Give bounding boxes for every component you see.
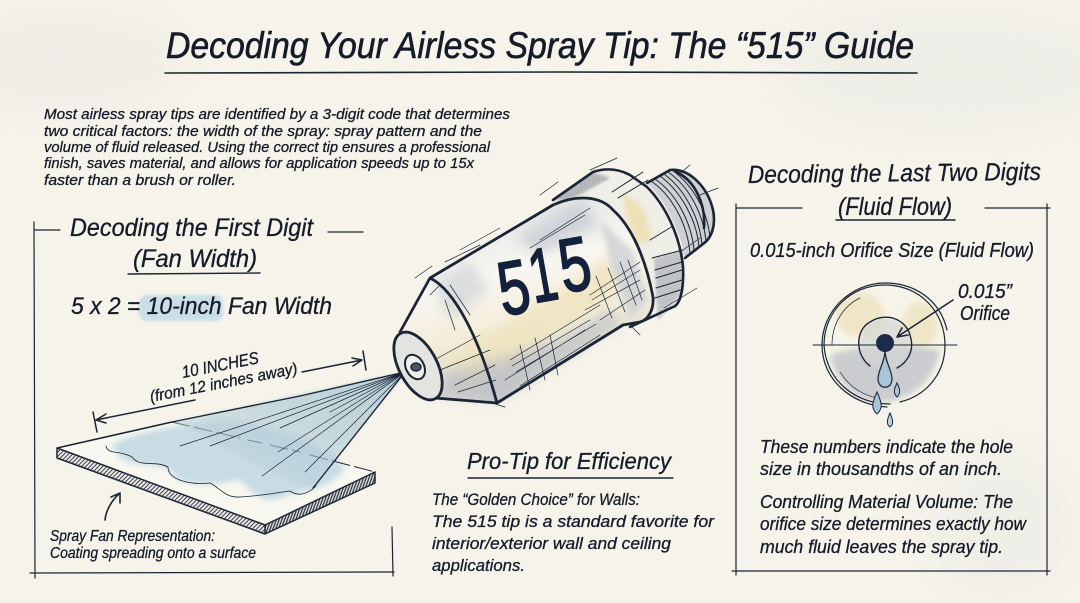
panel frame <box>30 222 394 578</box>
515 marking: 1 <box>522 231 564 320</box>
cylindrical body <box>400 198 653 403</box>
nozzle illustration <box>384 158 718 408</box>
intro text block: faster than a brush or roller. <box>44 172 236 189</box>
formula with highlight: 5 x 2 = 10-inch Fan Width <box>71 293 332 320</box>
panel: pro-tip for efficiency <box>432 448 715 575</box>
explanation text: These numbers indicate the hole <box>760 437 1013 457</box>
pro-tip text <box>432 490 715 575</box>
orifice size heading: 0.015-inch Orifice Size (Fluid Flow) <box>750 240 1034 262</box>
panel frame <box>732 204 1050 575</box>
heading: first digit: (Fan Width) <box>133 245 257 273</box>
explanation text: much fluid leaves the spray tip. <box>760 537 1003 557</box>
heading: last two digits: Decoding the Last Two Digits <box>748 158 1041 189</box>
panel: first digit fan width <box>30 214 405 578</box>
orifice diagram <box>813 283 957 427</box>
title: Decoding Your Airless Spray Tip: The “515” Guide <box>166 25 914 66</box>
explanation text: size in thousandths of an inch. <box>760 459 1002 479</box>
pro-tip text: The 515 tip is a standard favorite for <box>432 512 715 531</box>
pro-tip text: applications. <box>432 556 525 575</box>
explanation text: orifice size determines exactly how <box>760 514 1027 534</box>
pro-tip text: interior/exterior wall and ceiling <box>432 534 672 553</box>
surface with coating <box>57 420 375 534</box>
intro text block: two critical factors: the width of the spray: spray pattern and the <box>44 123 482 140</box>
heading: first digit <box>70 214 314 274</box>
orifice label <box>958 281 1013 325</box>
pro-tip text: The “Golden Choice” for Walls: <box>432 490 640 509</box>
caption: spray fan representation: Spray Fan Representation: <box>50 528 215 545</box>
hex collar <box>553 169 683 327</box>
explanation text <box>760 437 1027 557</box>
caption: spray fan representation <box>50 528 256 562</box>
heading: pro-tip: Pro-Tip for Efficiency <box>467 448 672 474</box>
arrow to surface <box>105 493 120 520</box>
intro text block: volume of fluid released. Using the correct tip ensures a professional <box>44 139 491 156</box>
dimension label: 10 inches: (from 12 inches away) <box>149 361 299 406</box>
515 marking: 5 <box>552 221 597 310</box>
orifice label: 0.015” <box>958 281 1013 303</box>
orifice arrow <box>897 300 953 337</box>
intro text block: finish, saves material, and allows for application speeds up to 15x <box>44 155 474 172</box>
spray fan <box>172 372 405 488</box>
intro text block <box>44 106 510 189</box>
heading: last two digits: (Fluid Flow) <box>838 193 952 221</box>
515 marking <box>491 221 597 333</box>
thread <box>647 170 714 258</box>
dimension label: 10 inches: 10 INCHES <box>180 348 261 382</box>
heading: last two digits <box>748 158 1041 221</box>
intro text block: Most airless spray tips are identified by a 3-digit code that determines <box>44 106 510 123</box>
sketch construction marks <box>415 158 718 407</box>
caption: spray fan representation: Coating spreading onto a surface <box>50 545 256 562</box>
orifice label: Orifice <box>960 303 1010 325</box>
heading: first digit: Decoding the First Digit <box>70 214 314 242</box>
explanation text: Controlling Material Volume: The <box>760 492 1013 512</box>
515 marking: 5 <box>491 244 536 333</box>
panel: last two digits fluid flow <box>732 158 1050 575</box>
nozzle face and orifice <box>384 324 452 408</box>
dimension arrows <box>93 351 366 432</box>
